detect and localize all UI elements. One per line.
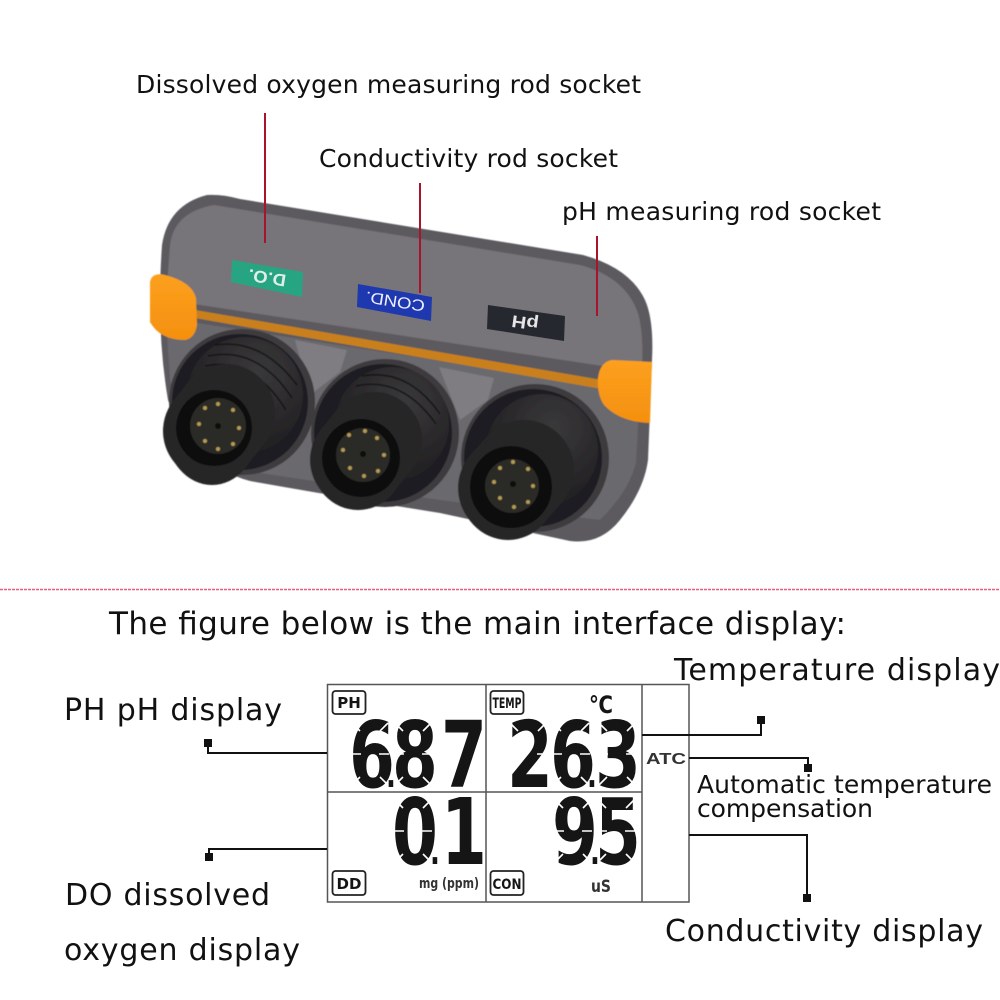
- reading: pH 6.87: .: [386, 755, 396, 796]
- label: conductivity socket: Conductivity rod socket: [319, 144, 618, 173]
- label: automatic temperature compensation: Automatic temperature: [697, 770, 992, 799]
- label: pH socket: pH measuring rod socket: [562, 197, 881, 226]
- tag: PH: PH: [337, 694, 361, 712]
- reading: temperature 26.3: .: [587, 755, 597, 796]
- socket: COND.: [311, 359, 459, 510]
- tag: TEMP: [490, 691, 524, 714]
- badge: pH: pH: [510, 311, 540, 334]
- connector: temperature display: [642, 717, 764, 735]
- tag: PH: [332, 691, 366, 714]
- label: automatic temperature compensation: compensation: [697, 794, 873, 823]
- reading: temperature 26.3: 2: [507, 702, 553, 809]
- housing body: [160, 195, 652, 542]
- connector: pH display: [205, 740, 327, 753]
- face panel: [166, 205, 642, 372]
- tag: CON: [490, 871, 524, 895]
- connector: dissolved oxygen display: [206, 849, 327, 860]
- tag: ATC: ATC: [646, 751, 687, 768]
- reading: temperature 26.3: [507, 702, 641, 809]
- tag: DO: [332, 871, 366, 895]
- reading: conductivity 9.5: 9: [552, 779, 598, 886]
- orange cap left: [150, 274, 197, 340]
- reading: temperature 26.3: 6: [550, 702, 596, 809]
- label: pH display: PH pH display: [64, 693, 282, 728]
- badge: COND.: COND.: [364, 287, 426, 314]
- reading: dissolved oxygen 0.1: [392, 779, 487, 886]
- connector: conductivity display: [689, 835, 810, 901]
- tag: CON: CON: [492, 877, 522, 893]
- badge: pH: [487, 305, 565, 341]
- orange cap right: [598, 360, 652, 423]
- heading: main interface: The figure below is the main interface display:: [108, 606, 846, 642]
- reading: pH 6.87: 6: [349, 702, 395, 809]
- pointer: pH: [596, 236, 598, 316]
- label: dissolved oxygen display: oxygen display: [64, 933, 300, 968]
- reading: conductivity 9.5: [552, 779, 641, 886]
- orange strip: [195, 310, 602, 389]
- socket: D.O.: [166, 329, 315, 485]
- pointer: conductivity: [419, 183, 421, 293]
- reading: dissolved oxygen 0.1: 0: [392, 779, 438, 886]
- connector: automatic temperature compensation: [689, 758, 811, 771]
- reading: dissolved oxygen 0.1: 1: [441, 779, 487, 886]
- tab between sockets 2 and 3: [439, 367, 494, 420]
- reading: dissolved oxygen 0.1: .: [430, 832, 440, 873]
- tag: TEMP: TEMP: [492, 696, 522, 712]
- badge: D.O.: D.O.: [247, 265, 287, 290]
- lower panel: [166, 318, 640, 520]
- pointer: dissolved oxygen: [264, 113, 266, 243]
- unit: mg (ppm): mg (ppm): [419, 876, 479, 892]
- label: temperature display: Temperature display: [673, 653, 1000, 688]
- reading: conductivity 9.5: .: [590, 832, 600, 873]
- badge: D.O.: [231, 260, 303, 297]
- tag: DO: DD: [337, 875, 361, 893]
- LCD panel: [327, 684, 689, 902]
- reading: pH 6.87: [349, 702, 487, 809]
- LCD grid: [327, 684, 689, 902]
- reading: conductivity 9.5: 5: [595, 779, 641, 886]
- unit: uS: uS: [591, 877, 611, 897]
- label: dissolved oxygen socket: Dissolved oxygen measuring rod socket: [136, 70, 641, 99]
- device: sensor socket housing: [150, 195, 652, 542]
- divider: [0, 588, 1000, 590]
- reading: temperature 26.3: 3: [595, 702, 641, 809]
- tab between sockets 1 and 2: [295, 340, 347, 395]
- reading: pH 6.87: 8: [392, 702, 438, 809]
- label: automatic temperature compensation: [697, 770, 992, 823]
- label: dissolved oxygen display: [64, 878, 300, 968]
- unit: Celsius: ℃: [589, 691, 613, 719]
- socket: pH: [459, 384, 609, 540]
- label: conductivity display: Conductivity display: [665, 914, 983, 949]
- badge: COND.: [357, 284, 432, 321]
- reading: pH 6.87: 7: [441, 702, 487, 809]
- label: dissolved oxygen display: DO dissolved: [65, 878, 270, 913]
